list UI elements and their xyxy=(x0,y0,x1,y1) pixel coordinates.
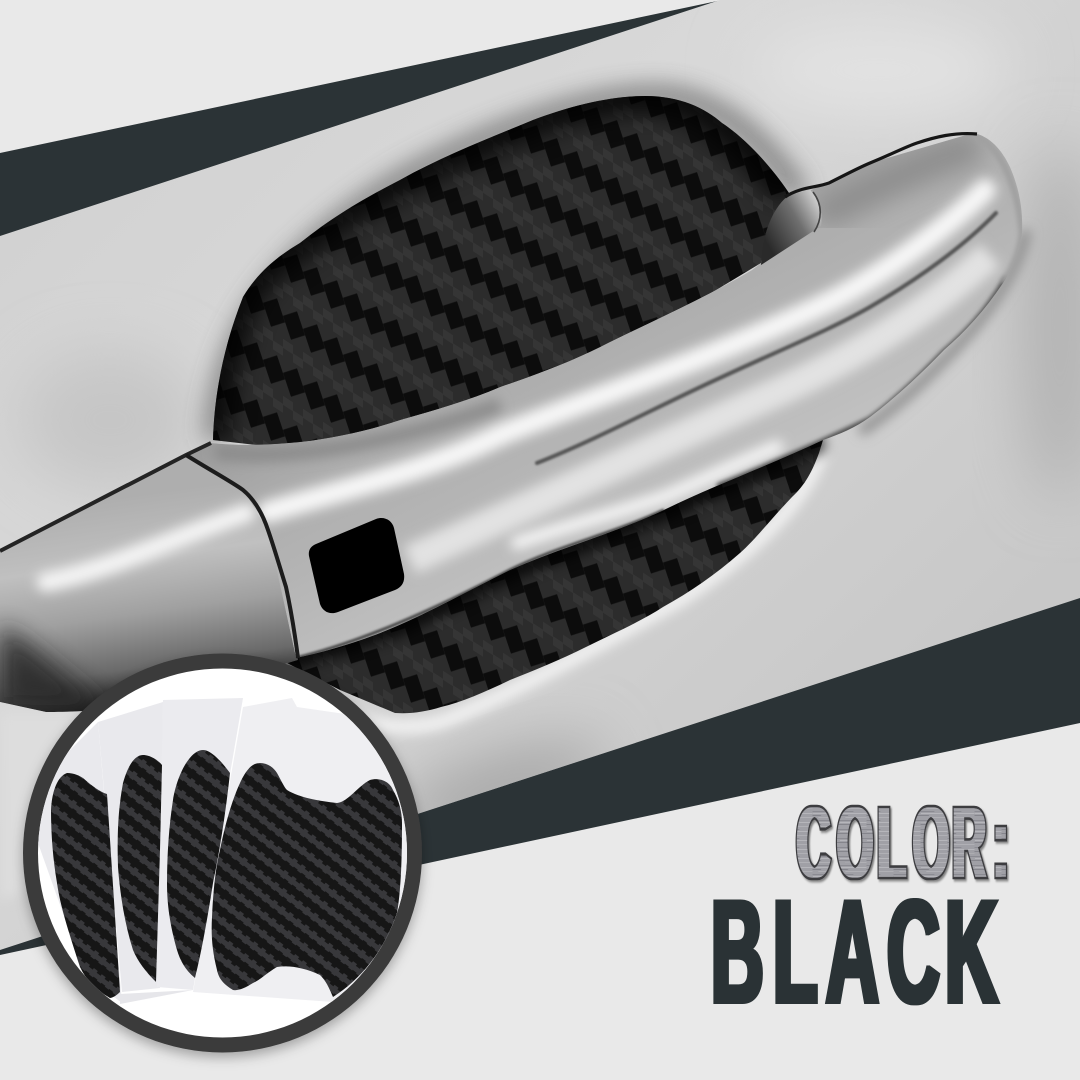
grip top grey area xyxy=(830,150,965,210)
door shading left xyxy=(32,356,193,487)
door handle left base xyxy=(0,455,298,712)
shadow under handle tip xyxy=(860,230,1026,432)
lower recess carbon sticker xyxy=(285,440,823,713)
sticker 2 xyxy=(118,755,162,982)
backing paper 3 xyxy=(157,698,243,990)
grip upper highlight xyxy=(268,190,985,512)
backing paper 2 xyxy=(98,702,163,992)
sticker 4 xyxy=(212,763,402,997)
heading: COLOR:: COLOR: xyxy=(797,785,1008,900)
grip top left shade xyxy=(215,405,500,454)
grip bottom edge line xyxy=(296,510,664,658)
lower recess highlight rim xyxy=(350,445,823,727)
base left shadow xyxy=(0,625,110,710)
top dark diagonal stripe xyxy=(0,0,722,237)
bottom paper strip xyxy=(120,990,193,1004)
grip lower body light xyxy=(410,255,990,560)
base highlight xyxy=(46,513,246,582)
backing paper 4 xyxy=(193,698,420,1010)
inset ring xyxy=(23,654,422,1052)
grip lower highlight xyxy=(517,447,777,543)
door light top right xyxy=(788,29,988,115)
grip crease xyxy=(537,213,996,463)
hinge small curve xyxy=(813,192,820,232)
sticker 3 xyxy=(167,750,230,978)
sticker 1 xyxy=(51,773,120,998)
handle top seam line xyxy=(785,134,977,197)
inset white background xyxy=(38,668,407,1038)
grip lower edge shadow xyxy=(720,280,1006,486)
bottom dark diagonal stripe xyxy=(0,597,1080,955)
upper recess carbon sticker xyxy=(213,96,789,445)
lower left door light band xyxy=(8,849,20,886)
door shading right edge xyxy=(1020,140,1080,500)
door handle grip xyxy=(186,133,1022,658)
handle joint seam xyxy=(186,455,298,658)
panel: sticker set inset xyxy=(23,654,422,1052)
lower door shading xyxy=(406,721,606,814)
tip shading xyxy=(975,136,1022,283)
heading: BLACK: BLACK xyxy=(711,872,998,1034)
inner handle hinge xyxy=(761,190,822,265)
backing paper 1 xyxy=(38,722,121,1002)
keyhole cover xyxy=(309,518,404,613)
door split line xyxy=(0,443,211,551)
soft shadow around recess xyxy=(215,95,800,440)
